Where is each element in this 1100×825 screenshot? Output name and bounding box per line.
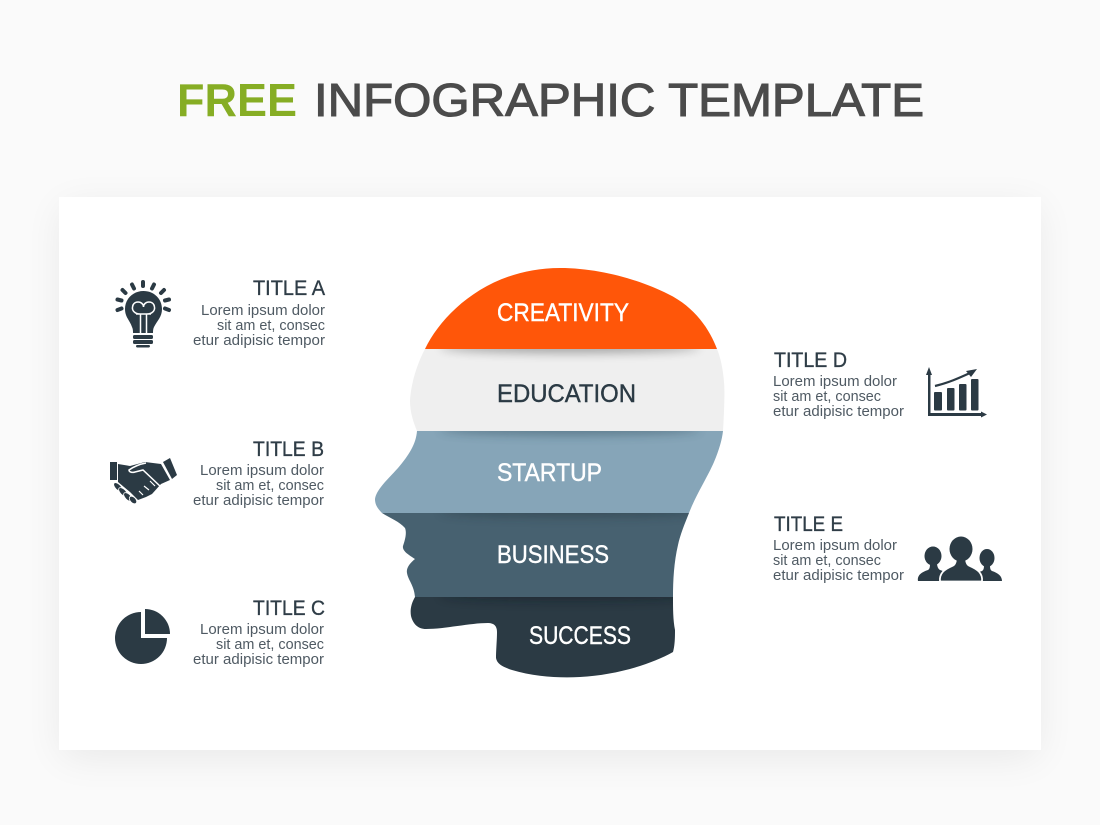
head band: creativity — [425, 268, 717, 349]
description: etur adipisic tempor — [773, 404, 904, 420]
head band: education: EDUCATION — [497, 380, 636, 408]
description: Lorem ipsum dolor — [200, 622, 324, 638]
title: INFOGRAPHIC TEMPLATE — [314, 74, 924, 126]
description — [193, 303, 325, 349]
icon: pie chart — [115, 609, 170, 664]
head band: startup: STARTUP — [497, 459, 602, 487]
item: title A — [118, 277, 325, 349]
heading: TITLE C — [253, 597, 325, 620]
head band: business: BUSINESS — [497, 541, 609, 569]
description — [193, 463, 324, 509]
title: FREE — [177, 74, 297, 126]
item: title B — [110, 438, 324, 509]
heading: TITLE E — [774, 513, 843, 536]
icon: handshake — [110, 458, 177, 505]
icon: bar chart — [926, 367, 987, 418]
description: etur adipisic tempor — [193, 333, 325, 349]
description: etur adipisic tempor — [193, 493, 324, 509]
heading: TITLE A — [253, 277, 325, 300]
description: sit am et, consec — [216, 637, 324, 653]
description: sit am et, consec — [217, 318, 325, 334]
description: etur adipisic tempor — [193, 652, 324, 668]
item: title D — [773, 349, 987, 420]
item: title C — [115, 597, 325, 668]
description — [773, 538, 904, 584]
description — [773, 374, 904, 420]
head band: education — [410, 341, 724, 431]
head band: success — [410, 597, 675, 678]
head band: startup — [375, 423, 723, 513]
icon: people — [918, 536, 1002, 582]
heading: TITLE B — [253, 438, 324, 461]
description — [193, 622, 324, 668]
description: sit am et, consec — [773, 389, 881, 405]
description: Lorem ipsum dolor — [201, 303, 325, 319]
head band: business — [382, 513, 689, 597]
head diagram — [375, 268, 724, 677]
description: Lorem ipsum dolor — [200, 463, 324, 479]
panel: white card — [59, 197, 1041, 757]
description: sit am et, consec — [216, 478, 324, 494]
icon: light bulb — [118, 282, 169, 348]
head band: creativity: CREATIVITY — [497, 299, 629, 327]
description: etur adipisic tempor — [773, 568, 904, 584]
description: Lorem ipsum dolor — [773, 538, 897, 554]
item: title E — [773, 513, 1002, 584]
description: Lorem ipsum dolor — [773, 374, 897, 390]
heading: TITLE D — [774, 349, 847, 372]
head band: success: SUCCESS — [529, 622, 631, 650]
description: sit am et, consec — [773, 553, 881, 569]
